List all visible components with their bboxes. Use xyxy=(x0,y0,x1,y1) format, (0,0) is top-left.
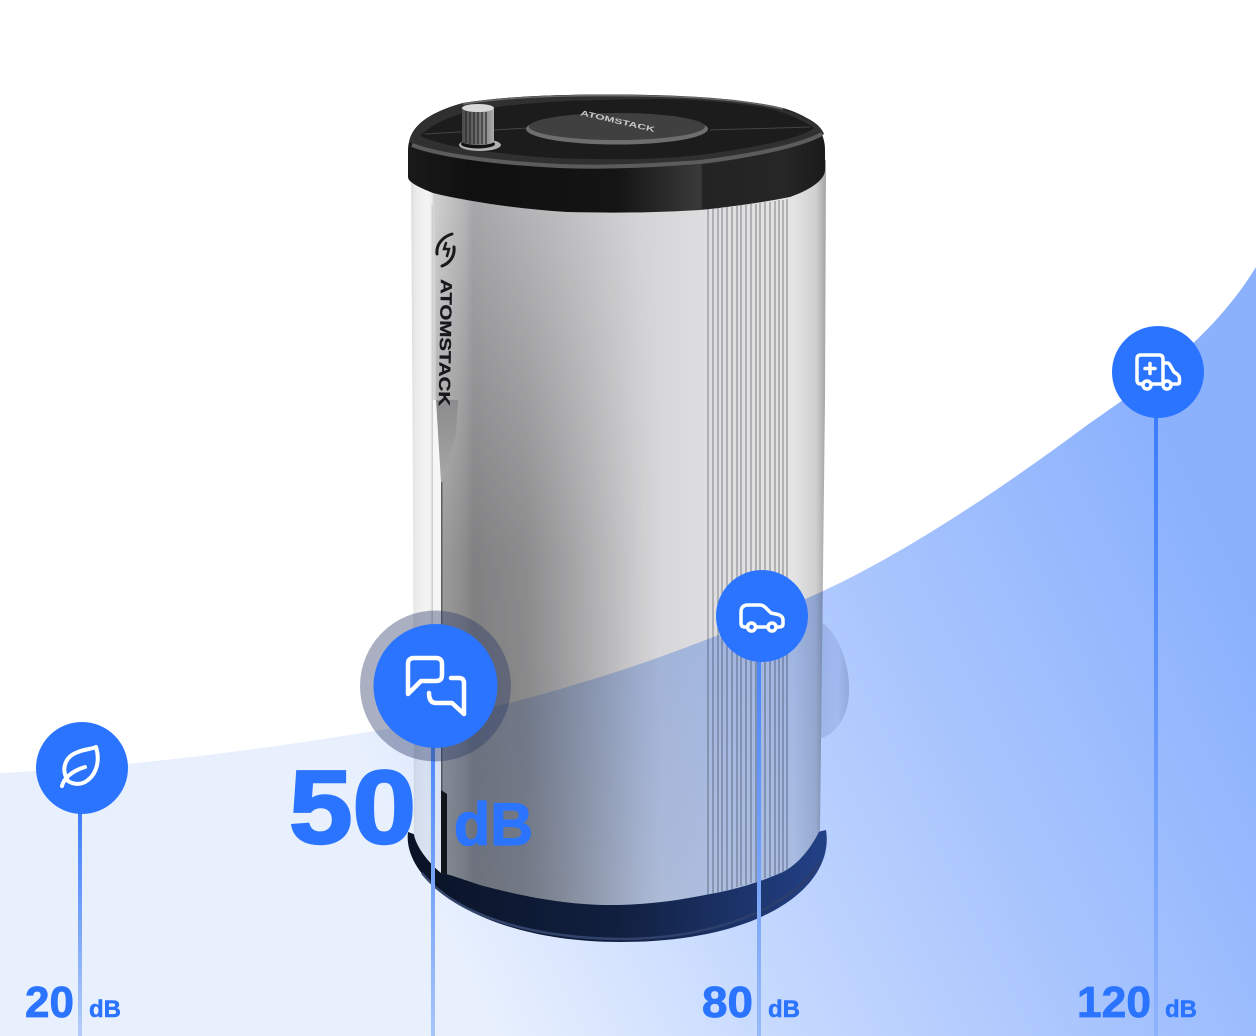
label: 20 dB: dB xyxy=(89,996,121,1023)
vent ribs xyxy=(708,199,787,895)
marker line: 50 dB xyxy=(431,740,435,1036)
knob xyxy=(462,108,494,145)
side bulge xyxy=(818,620,849,739)
product: air purifier device xyxy=(405,95,849,942)
label: 50 dB: 50 xyxy=(289,750,416,866)
marker line: 20 dB xyxy=(78,810,82,1036)
base rim highlight xyxy=(422,862,820,939)
label: 120 dB xyxy=(1077,978,1197,1027)
label: 120 dB: dB xyxy=(1165,996,1197,1023)
brand logo xyxy=(437,234,454,266)
strip edge xyxy=(432,205,433,624)
label: 80 dB xyxy=(702,978,800,1027)
seam line xyxy=(441,482,442,792)
marker: 20 dB leaf xyxy=(36,722,128,814)
base plate xyxy=(408,830,827,942)
icon: chat bubbles xyxy=(408,658,464,714)
label: 20 dB xyxy=(25,978,121,1027)
icon: leaf xyxy=(62,747,98,786)
lid top rim xyxy=(409,95,824,169)
50 dB halo xyxy=(360,610,511,762)
label: 80 dB: dB xyxy=(768,996,800,1023)
slot xyxy=(441,790,447,880)
lid center seam xyxy=(425,127,810,134)
marker: 120 dB ambulance xyxy=(1112,326,1204,418)
label: 50 dB: dB xyxy=(454,791,533,858)
lid back rim highlight xyxy=(463,96,783,109)
brand name: ATOMSTACK xyxy=(435,279,454,407)
knob ring xyxy=(459,139,501,151)
center disc xyxy=(526,114,708,144)
marker: 80 dB car xyxy=(716,570,808,662)
blue noise curve xyxy=(0,267,1256,1036)
body lower shading xyxy=(436,268,641,905)
label: 50 dB xyxy=(289,750,533,866)
marker: 50 dB chat xyxy=(374,624,498,748)
label: 80 dB: 80 xyxy=(702,978,753,1027)
groove notch xyxy=(436,400,458,462)
lid front rim highlight xyxy=(412,134,822,167)
label: 120 dB: 120 xyxy=(1077,978,1151,1027)
label: 20 dB: 20 xyxy=(25,978,74,1027)
lid xyxy=(408,95,825,213)
disc logo text: ATOMSTACK xyxy=(580,108,657,134)
seam highlight xyxy=(433,400,441,880)
lid top face xyxy=(420,99,814,159)
icon: ambulance xyxy=(1137,355,1180,384)
icon: car xyxy=(741,605,783,627)
cylinder body xyxy=(405,160,830,910)
marker line: 120 dB xyxy=(1154,415,1158,1036)
marker line: 80 dB xyxy=(757,658,761,1036)
